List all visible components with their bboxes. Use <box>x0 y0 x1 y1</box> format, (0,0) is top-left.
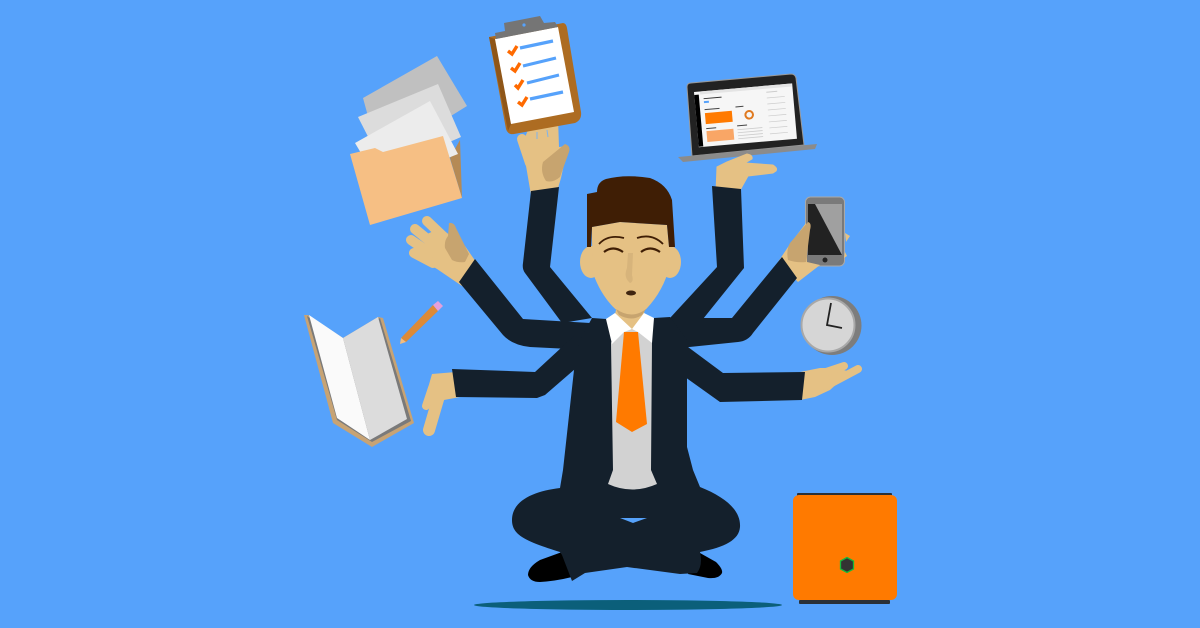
shoes <box>528 552 722 582</box>
shirt collar <box>606 313 654 344</box>
hand: middle left raised <box>411 221 476 286</box>
hand: middle right holding phone <box>778 223 850 282</box>
white shirt <box>608 325 657 490</box>
icon: smartphone thumb <box>787 222 811 262</box>
businessman figure <box>411 154 858 581</box>
hand: top right holding laptop <box>716 154 777 192</box>
icon: laptop <box>678 74 817 162</box>
icon: clock <box>802 296 862 355</box>
hand: top left holding clipboard <box>522 118 570 195</box>
icon: floor shadow <box>474 600 782 610</box>
eyebrows and eyes <box>599 236 663 252</box>
arms: middle left sleeve <box>459 259 590 350</box>
hand: lower left pointing down <box>426 372 460 430</box>
icon: clipboard checklist <box>489 16 581 134</box>
mouth <box>626 290 636 296</box>
suit torso <box>512 317 740 581</box>
face <box>592 222 669 315</box>
arms: middle right sleeve <box>670 257 797 349</box>
hand: lower right open palm <box>800 366 858 400</box>
icon: smartphone <box>806 197 844 266</box>
icon: open book <box>304 315 414 447</box>
ears <box>580 246 681 278</box>
neck <box>615 306 645 330</box>
arms: upper right sleeve <box>670 186 744 319</box>
head <box>580 176 681 318</box>
leg gap <box>620 518 647 523</box>
nose <box>626 253 633 283</box>
hair <box>587 176 675 247</box>
arms: lower right sleeve <box>670 335 805 402</box>
orange necktie <box>616 332 647 432</box>
icon: pencil <box>400 301 443 344</box>
icon: orange box <box>793 493 897 604</box>
arms: upper left sleeve <box>523 187 592 323</box>
arms: lower left sleeve <box>452 335 585 398</box>
neck shadow <box>616 309 646 318</box>
icon: folder with papers <box>350 56 467 225</box>
